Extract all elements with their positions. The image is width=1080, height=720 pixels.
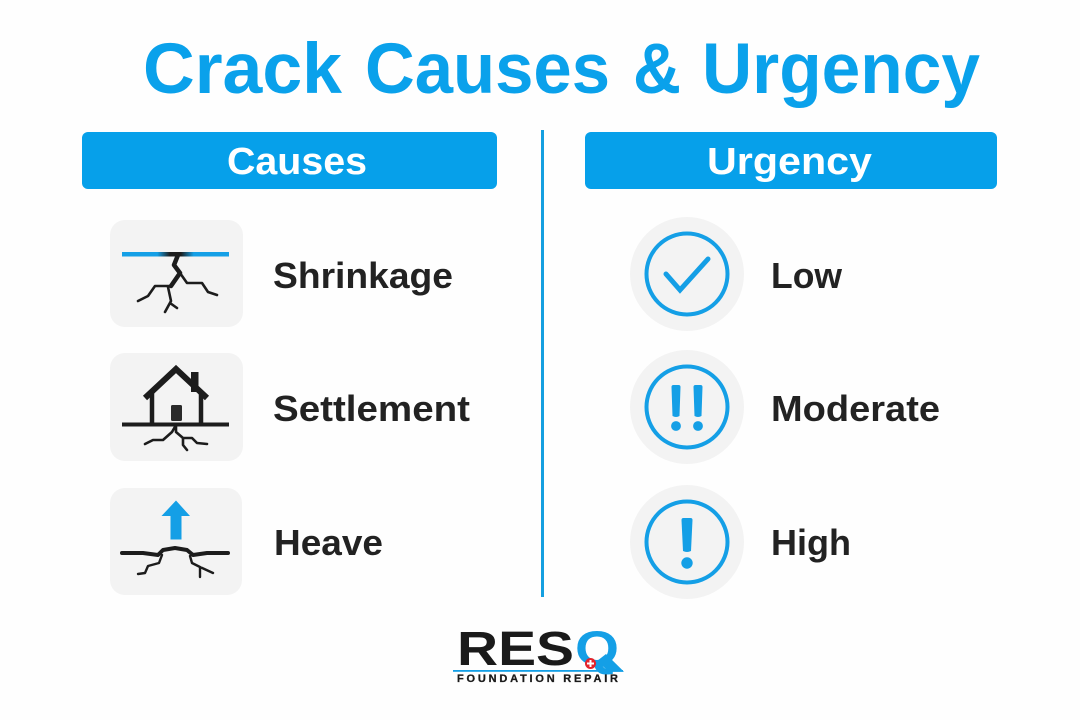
- label: moderate: Moderate: [771, 388, 940, 429]
- heading: urgency: Urgency: [707, 141, 872, 183]
- icon: moderate double exclamation: [630, 350, 744, 464]
- logo: RESQ Foundation Repair: FOUNDATION REPAIR: [457, 673, 618, 685]
- icon: shrinkage crack: [110, 220, 243, 327]
- divider between columns: [541, 130, 544, 597]
- label: high: High: [771, 522, 851, 563]
- title: Urgency: [702, 30, 980, 109]
- panel: urgency: [585, 132, 997, 599]
- label: heave: Heave: [274, 522, 383, 563]
- heading: causes: Causes: [227, 141, 367, 183]
- heading: causes: [82, 132, 497, 189]
- logo: RESQ Foundation Repair: [453, 623, 624, 685]
- panel: causes: [82, 132, 497, 595]
- heading: urgency: [585, 132, 997, 189]
- icon: settlement house: [110, 353, 243, 461]
- icon: high exclamation: [630, 485, 744, 599]
- logo: RESQ Foundation Repair: Q: [575, 623, 619, 676]
- title: [143, 30, 980, 109]
- label: low: Low: [771, 255, 843, 296]
- label: settlement: Settlement: [273, 388, 470, 429]
- icon: low check: [630, 217, 744, 331]
- logo: RESQ Foundation Repair: RES: [457, 623, 574, 676]
- title: Crack: [143, 30, 343, 109]
- label: shrinkage: Shrinkage: [273, 255, 453, 296]
- title: Causes: [365, 30, 610, 109]
- title: &: [633, 30, 681, 109]
- icon: heave arrow: [110, 488, 242, 595]
